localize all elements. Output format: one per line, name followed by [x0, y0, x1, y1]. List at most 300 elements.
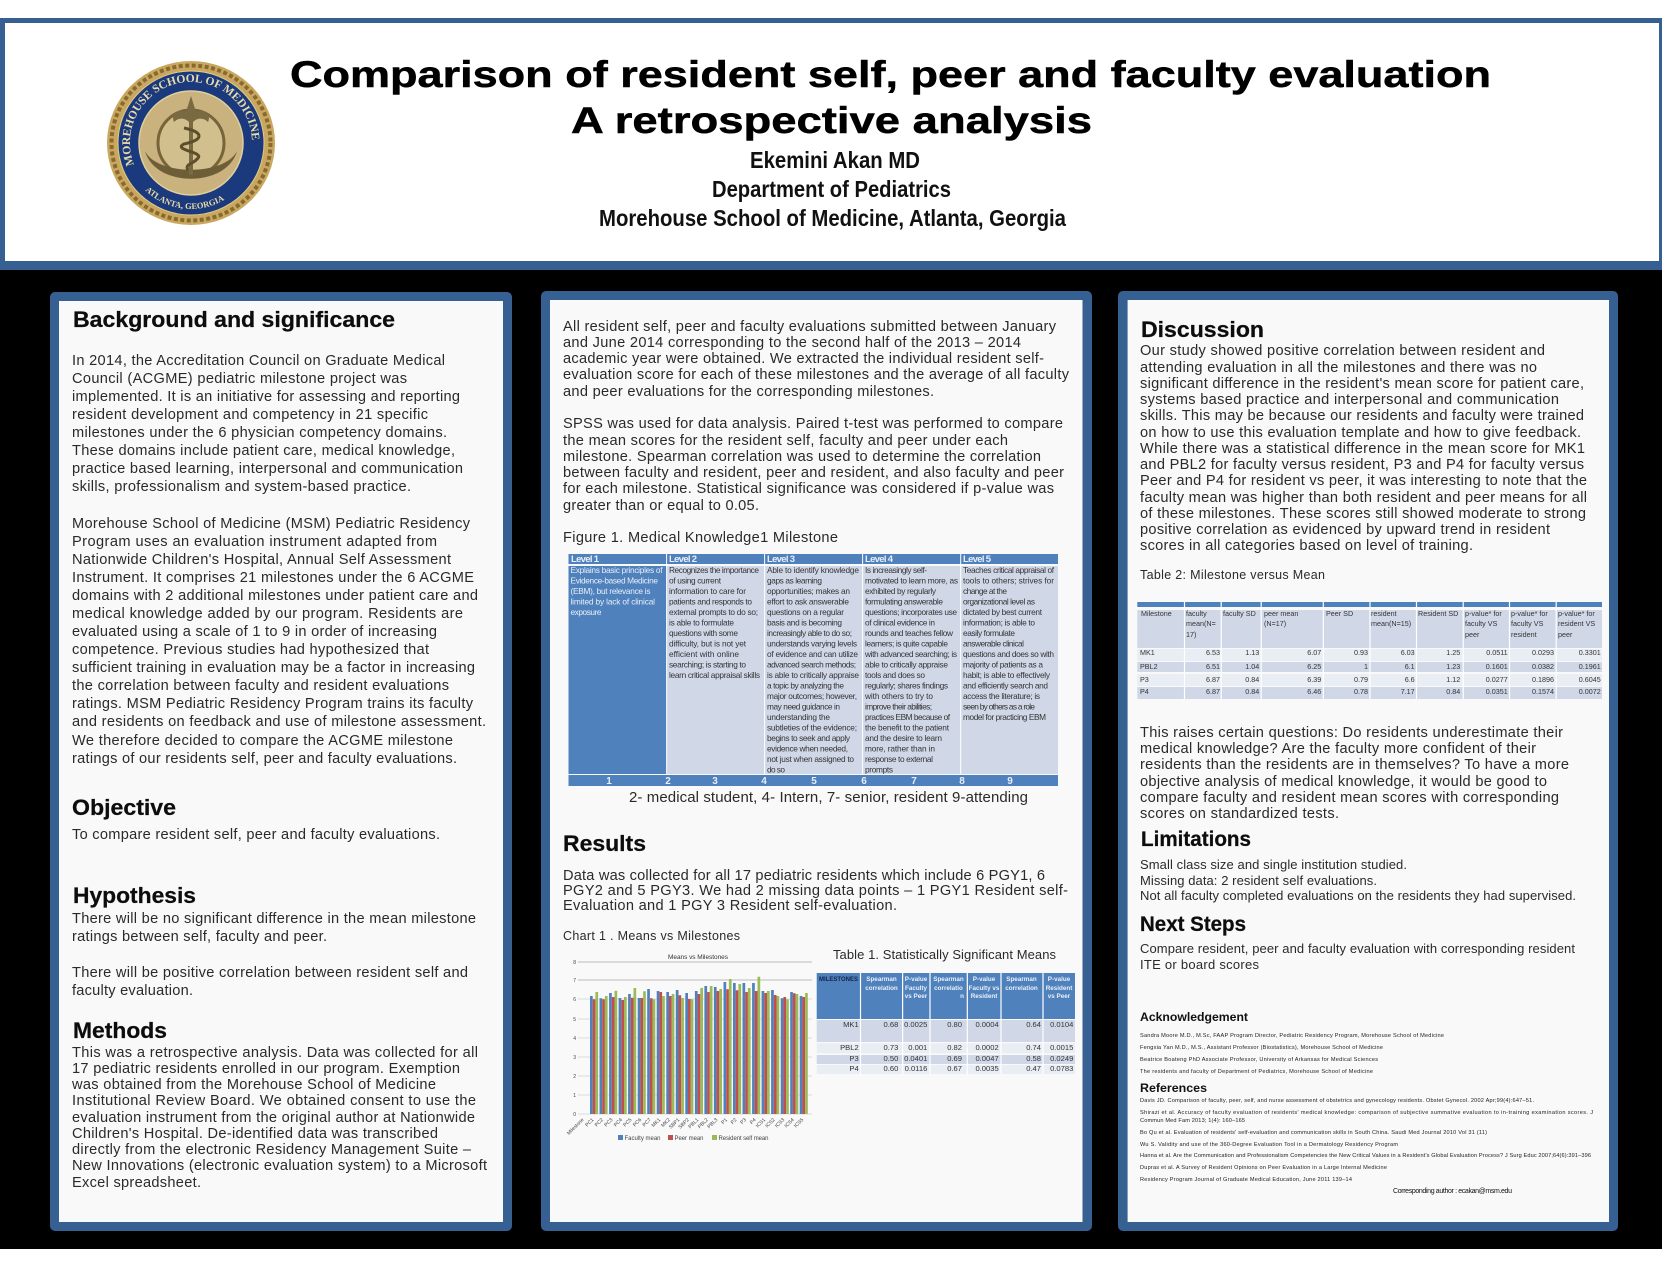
table 2 data rows: 0.0277: [1486, 675, 1508, 684]
level 5 description: easily formulate: [963, 628, 1015, 638]
level headers: Level 3: [767, 554, 795, 565]
table 1 header row: correlation: [1005, 985, 1038, 992]
x axis labels: PBL3: [706, 1117, 719, 1130]
text block: background paragraph two: the correlation between faculty and resident evaluations: [72, 678, 449, 694]
heading: hypothesis: Hypothesis: [73, 883, 196, 908]
heading: results: Results: [563, 831, 646, 856]
table 2 header row: peer mean: [1264, 609, 1298, 618]
table 2 data rows: 0.0382: [1532, 662, 1554, 671]
level 4 description: response to external: [865, 754, 933, 764]
chart legend: [618, 1135, 768, 1142]
score scale 1 to 9: [606, 776, 1013, 787]
level 3 description: a topic by analyzing the: [767, 680, 844, 690]
table 1 data rows: 0.58: [1026, 1054, 1041, 1063]
level 3 description: major outcomes; however,: [767, 691, 857, 701]
text block: discussion: attending evaluation in all the milestones and there was no: [1140, 360, 1537, 376]
level 4 description: practices EBM because of: [865, 712, 951, 722]
score scale 1 to 9: 7: [911, 776, 917, 787]
level 1 description: Evidence-based Medicine: [570, 576, 658, 586]
level 5 description: and efficiently search and: [963, 680, 1048, 690]
level 3 description: evidence when needed,: [767, 744, 848, 754]
text block: hypothesis: ratings between self, faculty and peer.: [72, 929, 327, 945]
chart legend: Resident self mean: [718, 1136, 768, 1142]
level 2 description: patients and responds to: [669, 596, 752, 606]
level 1 description: [570, 565, 663, 617]
text block: statistical analysis: the mean scores for the resident self, faculty and peer under each: [563, 433, 1008, 449]
text block: questions raised: objective analysis of medical knowledge, it would be good to: [1140, 774, 1547, 790]
text block: background paragraph one: implemented. It is an initiative for assessing and reporting: [72, 389, 460, 405]
table 1 data rows: 0.0025: [904, 1020, 927, 1029]
text block: questions raised: scores on standardized tests.: [1140, 806, 1339, 822]
table 1 caption: Table 1. Statistically Significant Means: [833, 947, 1056, 962]
table 1 data rows: 0.73: [884, 1043, 898, 1052]
level headers: Level 5: [963, 554, 992, 565]
text block: methods: New Innovations (electronic evaluation system) to a Microsoft: [72, 1158, 487, 1174]
y axis labels: 4: [573, 1036, 576, 1042]
heading: references: References: [1140, 1081, 1207, 1095]
level 3 description: begins to seek and apply: [767, 733, 851, 743]
level 4 description: tools and does so: [865, 670, 925, 680]
chart legend: Faculty mean: [624, 1136, 660, 1142]
table 1 header row: Faculty: [905, 985, 928, 992]
title: [290, 54, 1491, 141]
level 3 description: do so: [767, 764, 785, 774]
table 2 data rows: 6.1: [1405, 662, 1415, 671]
text block: background paragraph two: and residents on feedback and use of milestone assessment.: [72, 714, 486, 730]
level 3 description: opportunities; makes an: [767, 586, 850, 596]
level 4 description: rounds and teaches fellow: [865, 628, 954, 638]
level 1 description: limited by lack of clinical: [570, 596, 655, 606]
table 1 data rows: 0.0015: [1050, 1043, 1073, 1052]
table 1 data rows: P3: [849, 1054, 859, 1063]
level 5 description: dictated by best current: [963, 607, 1043, 617]
table 1 data rows: 0.0004: [975, 1020, 999, 1029]
text block: background paragraph two: ratings of our residents self, peer and faculty evaluations.: [72, 751, 457, 767]
level 1 description: exposure: [570, 607, 602, 617]
table 2 header row: [1141, 609, 1595, 639]
corresponding author: Corresponding author : ecakan@msm.edu: [1393, 1188, 1512, 1195]
level 2 description: searching; is starting to: [669, 660, 746, 670]
table 2 data rows: 6.39: [1307, 675, 1321, 684]
text block: discussion: While there was a statistical difference in the mean score for MK1: [1140, 441, 1585, 457]
table 2 data rows: 0.84: [1245, 687, 1259, 696]
heading: acknowledgement: Acknowledgement: [1140, 1010, 1248, 1024]
heading: methods: Methods: [73, 1018, 167, 1043]
table 1 data rows: 0.0047: [975, 1054, 999, 1063]
x axis labels: PBL1: [687, 1117, 700, 1130]
text block: references: Dupras et al. A Survey of Resident Opinions on Peer Evaluation in a Large Internal Medicine: [1140, 1165, 1387, 1171]
level 4 description: questions; incorporates use: [865, 607, 957, 617]
table 1 data rows: MK1: [843, 1020, 859, 1029]
text block: acknowledgement: [1140, 1033, 1444, 1075]
table 2 header row: mean(N=: [1186, 619, 1216, 628]
text block: limitations: Not all faculty completed evaluations on the residents they had supervised.: [1140, 888, 1576, 903]
table 1 data rows: 0.47: [1026, 1064, 1041, 1073]
text block: data collection: and peer evaluations for the corresponding milestones.: [563, 384, 934, 400]
text block: next steps: ITE or board scores: [1140, 957, 1260, 972]
table 2 header row: faculty VS: [1465, 619, 1498, 628]
text block: statistical analysis: [563, 416, 1064, 514]
title: A retrospective analysis: [571, 100, 1092, 141]
text block: questions raised: [1140, 725, 1569, 822]
bars: faculty mean: [590, 982, 802, 1114]
y axis labels: 1: [573, 1093, 576, 1099]
y axis labels: 5: [573, 1017, 576, 1023]
x axis labels: ICS5: [793, 1117, 805, 1129]
y axis labels: [573, 960, 576, 1118]
text block: references: Davis JD. Comparison of faculty, peer, self, and nurse assessment of obstetrics and gynecology residents. Obstet Gynecol. 2002 Apr;99(4):647–51.: [1140, 1098, 1534, 1104]
table 2 data rows: 1: [1364, 662, 1368, 671]
text block: references: Hanna et al. Are the Communication and Professionalism Competencies the New Critical Values in a Resident's Global Evaluation Process? J Surg Educ 2007;64(6):391–396: [1140, 1153, 1591, 1159]
level 4 description: [864, 565, 958, 774]
table 1 data rows: 0.60: [884, 1064, 898, 1073]
text block: background paragraph one: milestones under the 6 physician competency domains.: [72, 425, 447, 441]
logo: Morehouse School of Medicine seal: ATLANTA, GEORGIA: [145, 188, 224, 210]
text block: next steps: Compare resident, peer and faculty evaluation with corresponding resident: [1140, 941, 1575, 956]
table 2 data rows: 6.25: [1307, 662, 1321, 671]
bars: peer mean: [593, 989, 805, 1114]
y axis labels: 2: [573, 1074, 576, 1080]
table 2 data rows: 1.04: [1245, 662, 1259, 671]
table 2 header row: mean(N=15): [1371, 619, 1411, 628]
x axis labels: P1: [720, 1117, 729, 1126]
text block: methods: Children's Hospital. De-identified data was transcribed: [72, 1126, 438, 1142]
y axis labels: 6: [573, 997, 576, 1003]
table 2 data rows: 0.78: [1354, 687, 1368, 696]
table 2 header row: (N=17): [1264, 619, 1286, 628]
text block: objective: To compare resident self, peer and faculty evaluations.: [72, 827, 440, 843]
text block: limitations: Missing data: 2 resident self evaluations.: [1140, 873, 1377, 888]
x axis labels: ICS1: [755, 1117, 767, 1129]
text block: background paragraph one: practice based learning, interpersonal and communication: [72, 461, 463, 477]
level 4 description: able to critically appraise: [865, 660, 948, 670]
text block: background paragraph two: Instrument. It comprises 21 milestones under the 6 ACGME: [72, 570, 474, 586]
text block: references: Bo Qu et al. Evaluation of residents' self-evaluation and communication skills in South China. Saudi Med Journal 2010 Vol 31 (11): [1140, 1130, 1487, 1136]
text block: data collection: All resident self, peer and faculty evaluations submitted between January: [563, 319, 1057, 335]
text block: hypothesis: [72, 911, 476, 999]
table 2 header row: faculty VS: [1511, 619, 1544, 628]
text block: discussion: skills. This may be because our residents and faculty were trained: [1140, 408, 1584, 424]
bars: resident self mean: [595, 977, 808, 1114]
level 4 description: exhibited by regularly: [865, 586, 937, 596]
level 4 description: more, rather than in: [865, 744, 935, 754]
text block: references: Residency Program Journal of Graduate Medical Education, June 2011 139–14: [1140, 1177, 1352, 1183]
level 3 description: of evidence and can utilize: [767, 649, 858, 659]
level headers: Level 2: [669, 554, 697, 565]
level 4 description: the benefit to the patient: [865, 722, 950, 732]
text block: discussion: systems based practice and interpersonal and communication: [1140, 392, 1559, 408]
text block: background paragraph two: competence. Previous studies had hypothesized that: [72, 642, 429, 658]
text block: background paragraph two: [72, 516, 486, 767]
table 2 data rows: 6.46: [1307, 687, 1321, 696]
table 1 header row: MILESTONES: [819, 977, 858, 983]
level 4 description: of clinical evidence in: [865, 618, 935, 628]
level 5 description: access the literature; is: [963, 691, 1040, 701]
text block: background paragraph one: resident development and competency in 21 specific: [72, 407, 428, 423]
table 2 data rows: 0.0293: [1532, 648, 1554, 657]
table 1 data rows: 0.80: [947, 1020, 962, 1029]
level 3 description: effort to ask answerable: [767, 596, 849, 606]
table 1 data rows: 0.67: [947, 1064, 962, 1073]
table 1 header row: P-value: [905, 976, 928, 983]
level 4 description: Is increasingly self-: [865, 565, 927, 575]
table 2 header row: resident: [1371, 609, 1397, 618]
table 2 caption: Table 2: Milestone versus Mean: [1140, 568, 1325, 582]
level 4 description: and the desire to learn: [865, 733, 942, 743]
table 2 data rows: 1.12: [1446, 675, 1460, 684]
table 2 data rows: 0.1896: [1532, 675, 1554, 684]
level 1 description: (EBM), but relevance is: [570, 586, 650, 596]
text block: methods: This was a retrospective analysis. Data was collected for all: [72, 1045, 478, 1061]
text block: data collection: academic year were obtained. We extracted the individual resident self-: [563, 351, 1044, 367]
text block: discussion: [1140, 343, 1587, 554]
level 3 description: understands varying levels: [767, 638, 857, 648]
text block: background paragraph two: sufficient training in evaluation may be a factor in increasing: [72, 660, 475, 676]
table 1 header row: vs Peer: [905, 993, 928, 1000]
table 2 data rows: 6.87: [1206, 675, 1220, 684]
level 4 description: regularly; shares findings: [865, 680, 948, 690]
x axis labels: PC4: [613, 1117, 624, 1128]
text block: results: Evaluation and 1 PGY 3 Resident self-evaluation.: [563, 898, 897, 914]
x axis labels: SBP2: [677, 1117, 691, 1130]
table 1 data rows: 0.0035: [975, 1064, 999, 1073]
logo: Morehouse School of Medicine seal: MOREHOUSE SCHOOL OF MEDICINE: [122, 74, 260, 167]
chart legend: Peer mean: [674, 1136, 704, 1142]
text block: data collection: evaluation score for each of these milestones and the average of all faculty: [563, 367, 1070, 383]
text block: background paragraph one: These domains include patient care, medical knowledge,: [72, 443, 455, 459]
text block: background paragraph two: We therefore decided to compare the ACGME milestone: [72, 733, 453, 749]
authors and affiliation: [599, 147, 1066, 231]
x axis labels: ICS3: [774, 1117, 786, 1129]
text block: results: Data was collected for all 17 pediatric residents which include 6 PGY1, 6: [563, 868, 1045, 884]
table 2 data rows: 0.84: [1245, 675, 1259, 684]
text block: discussion: of these milestones. These scores still showed moderate to strong: [1140, 506, 1586, 522]
level 3 description: not just when assigned to: [767, 754, 854, 764]
text block: acknowledgement: Fengxia Yan M.D., M.S., Assistant Professor (Biostatistics), Morehouse School of Medicine: [1140, 1045, 1383, 1051]
x axis labels: SBP1: [668, 1117, 681, 1130]
text block: statistical analysis: SPSS was used for data analysis. Paired t-test was performed to compare: [563, 416, 1063, 432]
text block: statistical analysis: greater than or equal to 0.05.: [563, 498, 759, 514]
table 2 data rows: 7.17: [1401, 687, 1415, 696]
level 3 description: advanced search methods;: [767, 660, 856, 670]
table 2 data rows: 6.03: [1401, 648, 1415, 657]
text block: results: PGY2 and 5 PGY3. We had 2 missing data points – 1 PGY1 Resident self-: [563, 883, 1068, 899]
table 1 header row: Spearman: [1006, 976, 1037, 983]
level 3 description: understanding the: [767, 712, 830, 722]
table 1 header row: vs Peer: [1048, 993, 1071, 1000]
heading: discussion: Discussion: [1141, 317, 1264, 342]
level 1 description: Explains basic principles of: [570, 565, 663, 575]
level 2 description: [669, 565, 760, 680]
text block: discussion: positive correlation as evidenced by upward trend in resident: [1140, 522, 1550, 538]
table 2 data rows: P4: [1140, 687, 1149, 696]
panel: middle column: [541, 291, 1092, 1231]
level 5 description: habit; is able to effectively: [963, 670, 1051, 680]
x axis labels: MK2: [660, 1117, 672, 1129]
text block: background paragraph two: Nationwide Children's Hospital, Annual Self Assessment: [72, 552, 451, 568]
table 2 data rows: 0.3301: [1579, 648, 1601, 657]
table 2 header row: Milestone: [1141, 609, 1172, 618]
text block: background paragraph one: Council (ACGME) pediatric milestone project was: [72, 371, 407, 387]
score scale 1 to 9: 8: [959, 776, 965, 787]
table 2 data rows: 0.93: [1354, 648, 1368, 657]
text block: background paragraph one: [72, 353, 463, 495]
table 1 data rows: 0.74: [1026, 1043, 1041, 1052]
authors and affiliation: Department of Pediatrics: [712, 176, 951, 202]
table 2 data rows: 6.87: [1206, 687, 1220, 696]
level 5 description: organizational level as: [963, 596, 1035, 606]
text block: background paragraph one: In 2014, the Accreditation Council on Graduate Medical: [72, 353, 445, 369]
table 1 data rows: 0.64: [1026, 1020, 1041, 1029]
table 1 data rows: 0.50: [884, 1054, 898, 1063]
panel: right column: [1118, 291, 1618, 1231]
text block: background paragraph two: Program uses an evaluation instrument adapted from: [72, 534, 437, 550]
score scale 1 to 9: 6: [861, 776, 867, 787]
table 1 header row: [819, 976, 1073, 1000]
x axis labels: PC3: [603, 1117, 615, 1128]
table 1 data rows: PBL2: [840, 1043, 859, 1052]
heading: background and significance: Background and significance: [73, 307, 395, 332]
table 1 data rows: 0.0002: [975, 1043, 999, 1052]
text block: references: [1140, 1098, 1593, 1183]
level 2 description: learn critical appraisal skills: [669, 670, 760, 680]
text block: discussion: significant difference in the resident's mean score for patient care,: [1140, 376, 1584, 392]
text block: questions raised: This raises certain questions: Do residents underestimate their: [1140, 725, 1563, 741]
table 1 data rows: 0.0783: [1050, 1064, 1073, 1073]
table 2 header row: 17): [1186, 630, 1196, 639]
level 3 description: is able to critically appraise: [767, 670, 859, 680]
x axis labels: ICS2: [764, 1117, 777, 1129]
table 2 header row: p-value* for: [1511, 609, 1548, 618]
y axis labels: 3: [573, 1055, 576, 1061]
level 2 description: questions with some: [669, 628, 738, 638]
figure 1: milestone table: [568, 554, 1058, 787]
level 3 description: basis and is becoming: [767, 618, 842, 628]
table 2 data rows: 1.23: [1446, 662, 1460, 671]
level 2 description: Recognizes the importance: [669, 565, 759, 575]
score scale 1 to 9: 4: [761, 776, 767, 787]
text block: statistical analysis: for each milestone. Statistical significance was considered if p-value was: [563, 481, 1054, 497]
text block: next steps: [1140, 941, 1575, 972]
chart title: Means vs Milestones: [668, 954, 729, 961]
x axis labels: PC6: [632, 1117, 643, 1128]
text block: acknowledgement: Sandra Moore M.D., M.Sc, FAAP Program Director, Pediatric Residency Program, Morehouse School of Medicine: [1140, 1033, 1444, 1039]
table 1 data rows: 0.0249: [1050, 1054, 1073, 1063]
text block: questions raised: compare faculty and resident mean scores with corresponding: [1140, 790, 1559, 806]
x axis labels: P2: [730, 1117, 739, 1126]
table 2 header row: Resident SD: [1418, 609, 1458, 618]
table 2 data rows: 0.1961: [1579, 662, 1601, 671]
text block: background paragraph two: ratings. MSM Pediatric Residency Program trains its faculty: [72, 696, 474, 712]
level 3 description: increasingly able to do so;: [767, 628, 852, 638]
text block: discussion: Peer and P4 for resident vs peer, it was interesting to note that the: [1140, 473, 1587, 489]
table 1 data rows: P4: [849, 1064, 859, 1073]
level 3 description: subtleties of the evidence;: [767, 722, 857, 732]
text block: methods: evaluation instrument from the original author at Nationwide: [72, 1110, 475, 1126]
text block: references: Commun Med Fam 2013; 1(4): 160–165: [1140, 1118, 1245, 1124]
header banner: [0, 18, 1662, 270]
level 2 description: efficient with online: [669, 649, 739, 659]
table 1 data rows: 0.69: [947, 1054, 962, 1063]
level 2 description: information to care for: [669, 586, 746, 596]
table 2 header row: resident VS: [1558, 619, 1595, 628]
text block: methods: Institutional Review Board. We obtained consent to use the: [72, 1093, 476, 1109]
authors and affiliation: Morehouse School of Medicine, Atlanta, Georgia: [599, 205, 1066, 231]
x axis labels: [566, 1117, 805, 1137]
level 4 description: improve their abilities;: [865, 702, 932, 712]
score scale 1 to 9: 1: [606, 776, 612, 787]
level headers: [571, 554, 992, 565]
logo: Morehouse School of Medicine seal: [107, 61, 275, 225]
x axis labels: Milestone: [566, 1117, 586, 1137]
table 1 header row: correlatio: [934, 985, 963, 992]
text block: discussion: and PBL2 for faculty versus resident, P3 and P4 for faculty versus: [1140, 457, 1584, 473]
level headers: Level 4: [865, 554, 894, 565]
table 1 header row: P-value: [973, 976, 996, 983]
x axis labels: PC1: [584, 1117, 596, 1128]
table 2 data rows: 6.53: [1206, 648, 1220, 657]
level 2 description: of using current: [669, 576, 722, 586]
text block: hypothesis: There will be positive correlation between resident self and: [72, 965, 468, 981]
text block: methods: directly from the electronic Residency Management Suite –: [72, 1142, 472, 1158]
table 1 header row: Spearman: [866, 976, 897, 983]
score scale 1 to 9: 5: [811, 776, 817, 787]
table 1 header row: Spearman: [933, 976, 964, 983]
level 4 description: with others to try to: [864, 691, 933, 701]
y axis labels: 8: [573, 960, 576, 966]
level 4 description: learners; is quite capable: [865, 638, 948, 648]
table 2 data rows: 0.0511: [1486, 648, 1508, 657]
text block: background paragraph two: medical knowledge added by our program. Residents are: [72, 606, 463, 622]
table 2 header row: p-value* for: [1558, 609, 1595, 618]
level 4 description: formulating answerable: [865, 596, 943, 606]
table 2 data rows: 1.13: [1245, 648, 1259, 657]
level headers: Level 1: [571, 554, 600, 565]
table 2 data rows: 0.6045: [1579, 675, 1601, 684]
text block: limitations: Small class size and single institution studied.: [1140, 857, 1407, 872]
table 2 header row: peer: [1465, 630, 1480, 639]
table 1 header row: Resident: [1046, 985, 1073, 992]
level 3 description: gaps as learning: [767, 576, 822, 586]
table 1 data rows: 0.0116: [905, 1064, 927, 1073]
table 1 header row: P-value: [1048, 976, 1071, 983]
level 5 description: answerable clinical: [963, 638, 1024, 648]
text block: acknowledgement: Beatrice Boateng PhD Associate Professor, University of Arkansas for Medical Sciences: [1140, 1057, 1378, 1063]
text block: methods: was obtained from the Morehouse School of Medicine: [71, 1077, 436, 1093]
level 5 description: information; is able to: [963, 618, 1035, 628]
table 2 header row: peer: [1558, 630, 1573, 639]
y axis labels: 7: [573, 978, 576, 984]
text block: results: [563, 868, 1068, 914]
level 5 description: model for practicing EBM: [963, 712, 1046, 722]
text block: background paragraph two: domains with 2 additional milestones under patient care and: [72, 588, 478, 604]
level 2 description: is able to formulate: [669, 618, 734, 628]
text block: methods: 17 pediatric residents enrolled in our program. Exemption: [72, 1061, 460, 1077]
table 2: milestone versus mean: [1137, 602, 1602, 699]
text block: statistical analysis: between faculty and resident, peer and resident, and also faculty and peer: [563, 465, 1064, 481]
table 2 data rows: 0.84: [1446, 687, 1460, 696]
text block: methods: Excel spreadsheet.: [72, 1175, 201, 1191]
score scale 1 to 9: 2: [665, 776, 671, 787]
text block: discussion: on how to use this evaluation template and how to give feedback.: [1140, 425, 1581, 441]
level 4 description: motivated to learn more, as: [865, 576, 958, 586]
text block: references: Shirazi et al. Accuracy of faculty evaluation of residents' medical knowledge: comparison of subjective summative evaluation to in-training examination scores. J: [1140, 1110, 1593, 1116]
x axis labels: MK1: [651, 1117, 662, 1129]
level 3 description: [767, 565, 859, 774]
table 1 header row: Resident: [971, 993, 998, 1000]
score scale 1 to 9: 3: [712, 776, 718, 787]
table 2 data rows: [1140, 648, 1601, 696]
